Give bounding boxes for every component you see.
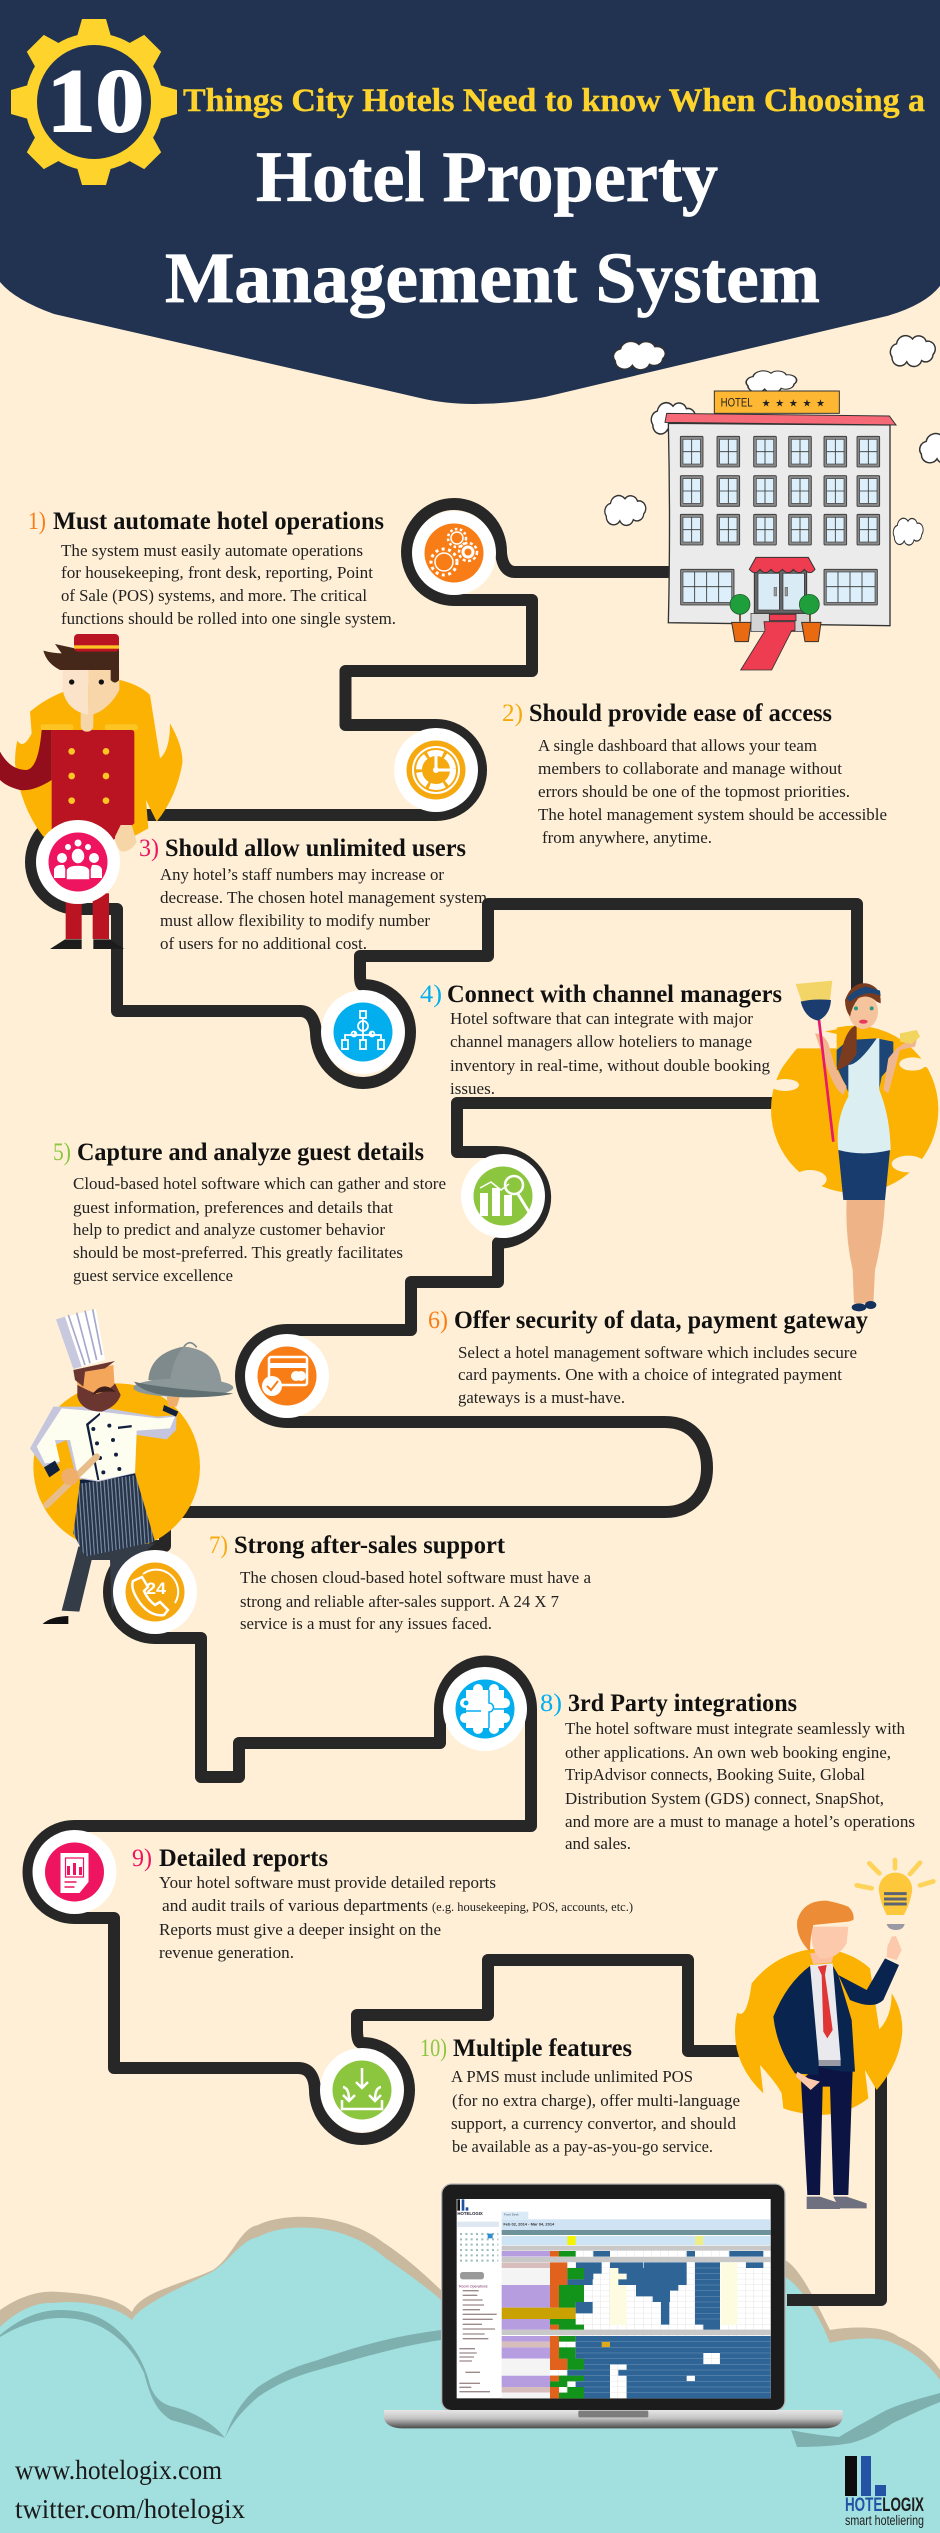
item 4: channel managers: Connect with channel managers (447, 981, 782, 1008)
item 3: unlimited users: must allow flexibility to modify number (160, 911, 430, 930)
icon: report document (32, 1830, 116, 1914)
item 6: security and payments: gateways is a must-have. (458, 1388, 625, 1407)
item 4: channel managers: channel managers allow hoteliers to manage (450, 1032, 752, 1051)
item 10: multiple features: A PMS must include unlimited POS (451, 2067, 693, 2086)
header banner (0, 0, 940, 404)
item 8: third party integrations: other applications. An own web booking engine, (565, 1743, 891, 1762)
item 8: third party integrations: 3rd Party integrations (568, 1690, 797, 1717)
item 8: third party integrations: Distribution System (GDS) connect, SnapShot, (565, 1789, 884, 1808)
item 10: multiple features: 10) (420, 2035, 447, 2062)
title: Hotel Property (256, 137, 718, 217)
logo: Hotelogix (845, 2456, 924, 2528)
footer links: twitter.com/hotelogix (15, 2494, 245, 2524)
item 7: after-sales support: 7) (209, 1532, 228, 1559)
item 5: guest details (53, 1139, 545, 1285)
item 10: multiple features (320, 2035, 740, 2156)
item 10: multiple features: be available as a pay-as-you-go service. (452, 2137, 713, 2156)
item 7: after-sales support: strong and reliable after-sales support. A 24 X 7 (240, 1592, 559, 1611)
illustration: hotel building (665, 391, 896, 670)
item 9: detailed reports: Your hotel software must provide detailed reports (159, 1873, 496, 1892)
icon: arrows into tray (320, 2048, 404, 2132)
item 3: unlimited users: of users for no additional cost. (160, 934, 367, 953)
item 5: guest details: should be most-preferred. This greatly facilitates (73, 1243, 403, 1262)
illustration: hotel building: HOTEL (721, 396, 753, 410)
item 9: detailed reports: 9) (132, 1845, 152, 1872)
item 1: automate hotel operations: Must automate hotel operations (53, 508, 384, 535)
item 6: security and payments (245, 1307, 868, 1418)
laptop with PMS dashboard: HOTELOGIX (457, 2211, 483, 2216)
footer clouds (0, 2217, 940, 2533)
connector path (29, 504, 881, 2300)
laptop with PMS dashboard (384, 2184, 843, 2428)
title (165, 83, 925, 318)
decorative clouds around hotel (605, 336, 940, 545)
item 6: security and payments: Select a hotel management software which includes secure (458, 1343, 857, 1362)
item 5: guest details: guest information, preferences and details that (73, 1198, 393, 1217)
item 9: detailed reports (32, 1830, 633, 1962)
icon: analytics magnifier (461, 1154, 545, 1238)
item 4: channel managers: 4) (420, 981, 442, 1008)
item 5: guest details: 5) (53, 1139, 71, 1166)
gear badge with number 10: 10 (47, 52, 144, 151)
item 7: after-sales support: service is a must for any issues faced. (240, 1614, 492, 1633)
illustration: maid with broom (767, 981, 940, 1311)
item 1: automate hotel operations: The system must easily automate operations (61, 541, 363, 560)
item 5: guest details: Capture and analyze guest details (77, 1139, 424, 1166)
item 8: third party integrations: 8) (540, 1690, 562, 1717)
item 8: third party integrations: and more are a must to manage a hotel’s operations (565, 1812, 915, 1831)
item 4: channel managers: issues. (450, 1079, 495, 1098)
item 3: unlimited users: 3) (139, 835, 159, 862)
item 8: third party integrations: TripAdvisor connects, Booking Suite, Global (565, 1765, 865, 1784)
item 1: automate hotel operations: for housekeeping, front desk, reporting, Point (61, 563, 373, 582)
laptop with PMS dashboard: Front Desk (504, 2212, 519, 2216)
illustration: businessman with light bulb (735, 1860, 933, 2209)
item 1: automate hotel operations: functions should be rolled into one single system. (61, 609, 396, 628)
item 2: ease of access: errors should be one of the topmost priorities. (538, 782, 850, 801)
item 9: detailed reports: Reports must give a deeper insight on the (159, 1920, 441, 1939)
item 8: third party integrations (443, 1667, 915, 1853)
item 3: unlimited users: Any hotel’s staff numbers may increase or (160, 865, 444, 884)
item 1: automate hotel operations (28, 508, 496, 628)
icon: puzzle pieces (443, 1667, 527, 1751)
item 5: guest details: help to predict and analyze customer behavior (73, 1220, 385, 1239)
illustration: hotel building: ★★★★★ (762, 399, 825, 410)
item 4: channel managers (321, 981, 782, 1098)
item 10: multiple features: Multiple features (453, 2035, 632, 2062)
item 7: after-sales support (113, 1532, 591, 1634)
logo: Hotelogix: HOTELOGIX (845, 2495, 924, 2516)
item 3: unlimited users (36, 820, 487, 953)
item 8: third party integrations: The hotel software must integrate seamlessly with (565, 1719, 905, 1738)
item 2: ease of access: 2) (502, 700, 523, 727)
item 4: channel managers: Hotel software that can integrate with major (450, 1009, 753, 1028)
footer links: www.hotelogix.com (15, 2455, 222, 2485)
item 9: detailed reports: revenue generation. (159, 1943, 294, 1962)
icon: network flow (321, 990, 405, 1074)
laptop with PMS dashboard: Room Operations (459, 2284, 488, 2288)
item 10: multiple features: (for no extra charge), offer multi-language (452, 2091, 740, 2110)
illustration: bellboy (0, 634, 182, 949)
item 1: automate hotel operations: 1) (28, 508, 46, 535)
item 7: after-sales support: The chosen cloud-based hotel software must have a (240, 1568, 591, 1587)
item 2: ease of access: A single dashboard that allows your team (538, 736, 817, 755)
item 2: ease of access: The hotel management system should be accessible (538, 805, 887, 824)
illustration: chef with cloche (30, 1309, 233, 1624)
icon: group of people (36, 820, 120, 904)
item 10: multiple features: support, a currency convertor, and should (451, 2114, 737, 2133)
icon: dashboard clock (394, 728, 478, 812)
item 9: detailed reports: and audit trails of various departments (162, 1896, 428, 1915)
item 3: unlimited users: decrease. The chosen hotel management system (160, 888, 487, 907)
item 2: ease of access: from anywhere, anytime. (542, 828, 712, 847)
icon: gears (412, 511, 496, 595)
item 7: after-sales support: Strong after-sales support (234, 1532, 506, 1559)
icon: credit card (245, 1334, 329, 1418)
item 5: guest details: guest service excellence (73, 1266, 233, 1285)
title: Management System (165, 238, 820, 318)
item 2: ease of access: Should provide ease of access (529, 700, 832, 727)
icon: 24 hour phone (113, 1550, 197, 1634)
item 5: guest details: Cloud-based hotel software which can gather and store (73, 1174, 446, 1193)
item 6: security and payments: card payments. One with a choice of integrated payment (458, 1365, 842, 1384)
gear badge with number 10 (11, 19, 177, 185)
icon: 24 hour phone: 24 (146, 1579, 167, 1598)
footer links (15, 2455, 245, 2524)
item 8: third party integrations: and sales. (565, 1834, 631, 1853)
item 9: detailed reports: Detailed reports (159, 1845, 328, 1872)
item 6: security and payments: Offer security of data, payment gateway (454, 1307, 868, 1334)
title: Things City Hotels Need to know When Choosing a (183, 83, 925, 119)
item 9: detailed reports: (e.g. housekeeping, POS, accounts, etc.) (432, 1900, 633, 1914)
item 2: ease of access: members to collaborate and manage without (538, 759, 842, 778)
item 2: ease of access (394, 700, 887, 847)
item 1: automate hotel operations: of Sale (POS) systems, and more. The critical (61, 586, 367, 605)
item 6: security and payments: 6) (428, 1307, 448, 1334)
laptop with PMS dashboard: Feb 02, 2014 - Mar 04, 2014 (503, 2222, 555, 2227)
item 4: channel managers: inventory in real-time, without double booking (450, 1056, 770, 1075)
item 3: unlimited users: Should allow unlimited users (165, 835, 466, 862)
